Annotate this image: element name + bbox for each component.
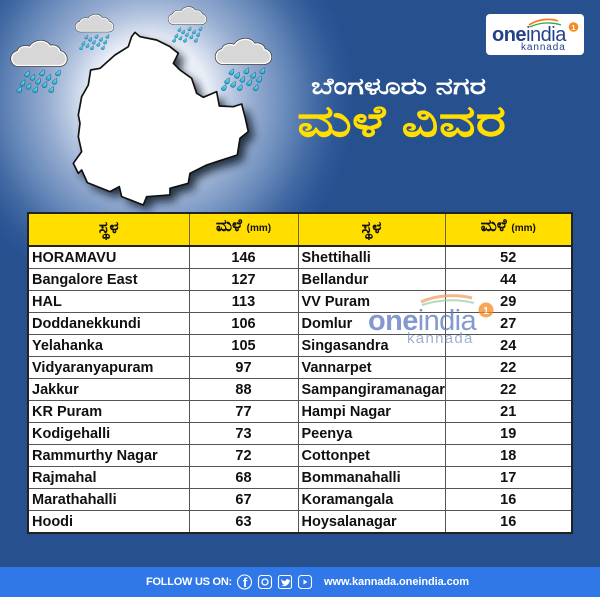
title line: rain details: ಮಳೆ ವಿವರ	[297, 97, 506, 146]
icon: rain cloud small left	[76, 15, 113, 50]
rainfall table: 18	[500, 448, 516, 464]
watermark logo: oneindia	[368, 305, 476, 337]
rainfall table: 24	[500, 338, 516, 354]
rainfall table: Yelahanka	[32, 338, 103, 354]
rainfall table: Hampi Nagar	[302, 404, 391, 420]
website: www.kannada.oneindia.com	[324, 576, 469, 588]
logo: oneindia kannada: 1	[571, 23, 576, 32]
rainfall table: 105	[231, 338, 256, 354]
map shadow	[79, 38, 254, 211]
rainfall table: 19	[500, 426, 516, 442]
rainfall table: ಮಳೆ (mm)	[216, 216, 271, 235]
rainfall table: Marathahalli	[32, 492, 117, 508]
rainfall table: Hoysalanagar	[302, 514, 397, 530]
rainfall table	[27, 212, 573, 534]
rainfall table: Shettihalli	[302, 250, 371, 266]
rainfall table: 106	[231, 316, 256, 332]
rainfall table: HORAMAVU	[32, 250, 116, 266]
icon: rain cloud right	[216, 39, 271, 91]
rainfall table: ಸ್ಥಳ	[99, 218, 119, 236]
rainfall table: ಮಳೆ (mm)	[481, 216, 536, 235]
rainfall table: Sampangiramanagar	[302, 382, 445, 398]
rainfall table: 73	[235, 426, 252, 442]
rainfall table: 67	[235, 492, 252, 508]
rainfall table: Cottonpet	[302, 448, 370, 464]
rainfall table: ಸ್ಥಳ	[362, 218, 381, 236]
rainfall table: 22	[500, 360, 516, 376]
rainfall table: Vidyaranyapuram	[32, 360, 153, 376]
rainfall table: Rajmahal	[32, 470, 96, 486]
rainfall table: 52	[500, 250, 516, 266]
rainfall table: Jakkur	[32, 382, 79, 398]
rainfall table: Vannarpet	[302, 360, 372, 376]
rainfall table: Kodigehalli	[32, 426, 110, 442]
rainfall table: 113	[232, 294, 255, 310]
icon: instagram	[258, 576, 272, 588]
watermark logo: kannada	[407, 330, 474, 347]
title line: Bengaluru city: ಬೆಂಗಳೂರು ನಗರ	[311, 73, 486, 99]
rainfall table: 72	[235, 448, 252, 464]
icon: Bengaluru map	[73, 32, 248, 205]
illustration: map and rain clouds	[10, 6, 272, 212]
rainfall table: 17	[500, 470, 516, 486]
rainfall table: 44	[500, 272, 516, 288]
watermark logo	[368, 294, 494, 347]
icon: rain cloud left	[12, 41, 66, 93]
rainfall table: Bellandur	[302, 272, 368, 288]
icon: youtube	[298, 576, 312, 588]
rainfall table: Doddanekkundi	[32, 316, 141, 332]
logo: oneindia kannada: kannada	[521, 42, 566, 53]
rainfall table: Domlur	[302, 316, 352, 332]
logo: oneindia kannada: oneindia	[492, 24, 566, 46]
follow us label: FOLLOW US ON:	[146, 576, 232, 588]
rainfall table: 22	[500, 382, 516, 398]
rainfall table: 27	[500, 316, 516, 332]
rainfall table: 127	[231, 272, 256, 288]
icon: facebook: f	[243, 575, 248, 590]
rainfall table: Peenya	[302, 426, 352, 442]
rainfall table: HAL	[32, 294, 62, 310]
watermark logo: 1	[483, 306, 489, 317]
rainfall table: 16	[500, 492, 516, 508]
rainfall table: 63	[235, 514, 252, 530]
icon: rain cloud small right	[169, 7, 206, 42]
rainfall table: Singasandra	[302, 338, 389, 354]
rainfall table: 16	[500, 514, 516, 530]
rainfall table: Hoodi	[32, 514, 73, 530]
rainfall table: 88	[235, 382, 252, 398]
rainfall table: 146	[231, 250, 256, 266]
rainfall table: Rammurthy Nagar	[32, 448, 158, 464]
rainfall table: VV Puram	[302, 294, 370, 310]
rainfall table: 77	[235, 404, 252, 420]
rainfall table: Bangalore East	[32, 272, 138, 288]
social icons	[236, 574, 312, 590]
rainfall table: 21	[500, 404, 516, 420]
icon: twitter	[278, 576, 292, 588]
logo: oneindia kannada	[486, 14, 584, 55]
rainfall table: 68	[235, 470, 252, 486]
rainfall table: 97	[235, 360, 252, 376]
rainfall table: Koramangala	[302, 492, 393, 508]
rainfall table: Bommanahalli	[302, 470, 401, 486]
rainfall table: KR Puram	[32, 404, 102, 420]
footer bar	[0, 567, 600, 597]
rainfall table: 29	[500, 294, 516, 310]
